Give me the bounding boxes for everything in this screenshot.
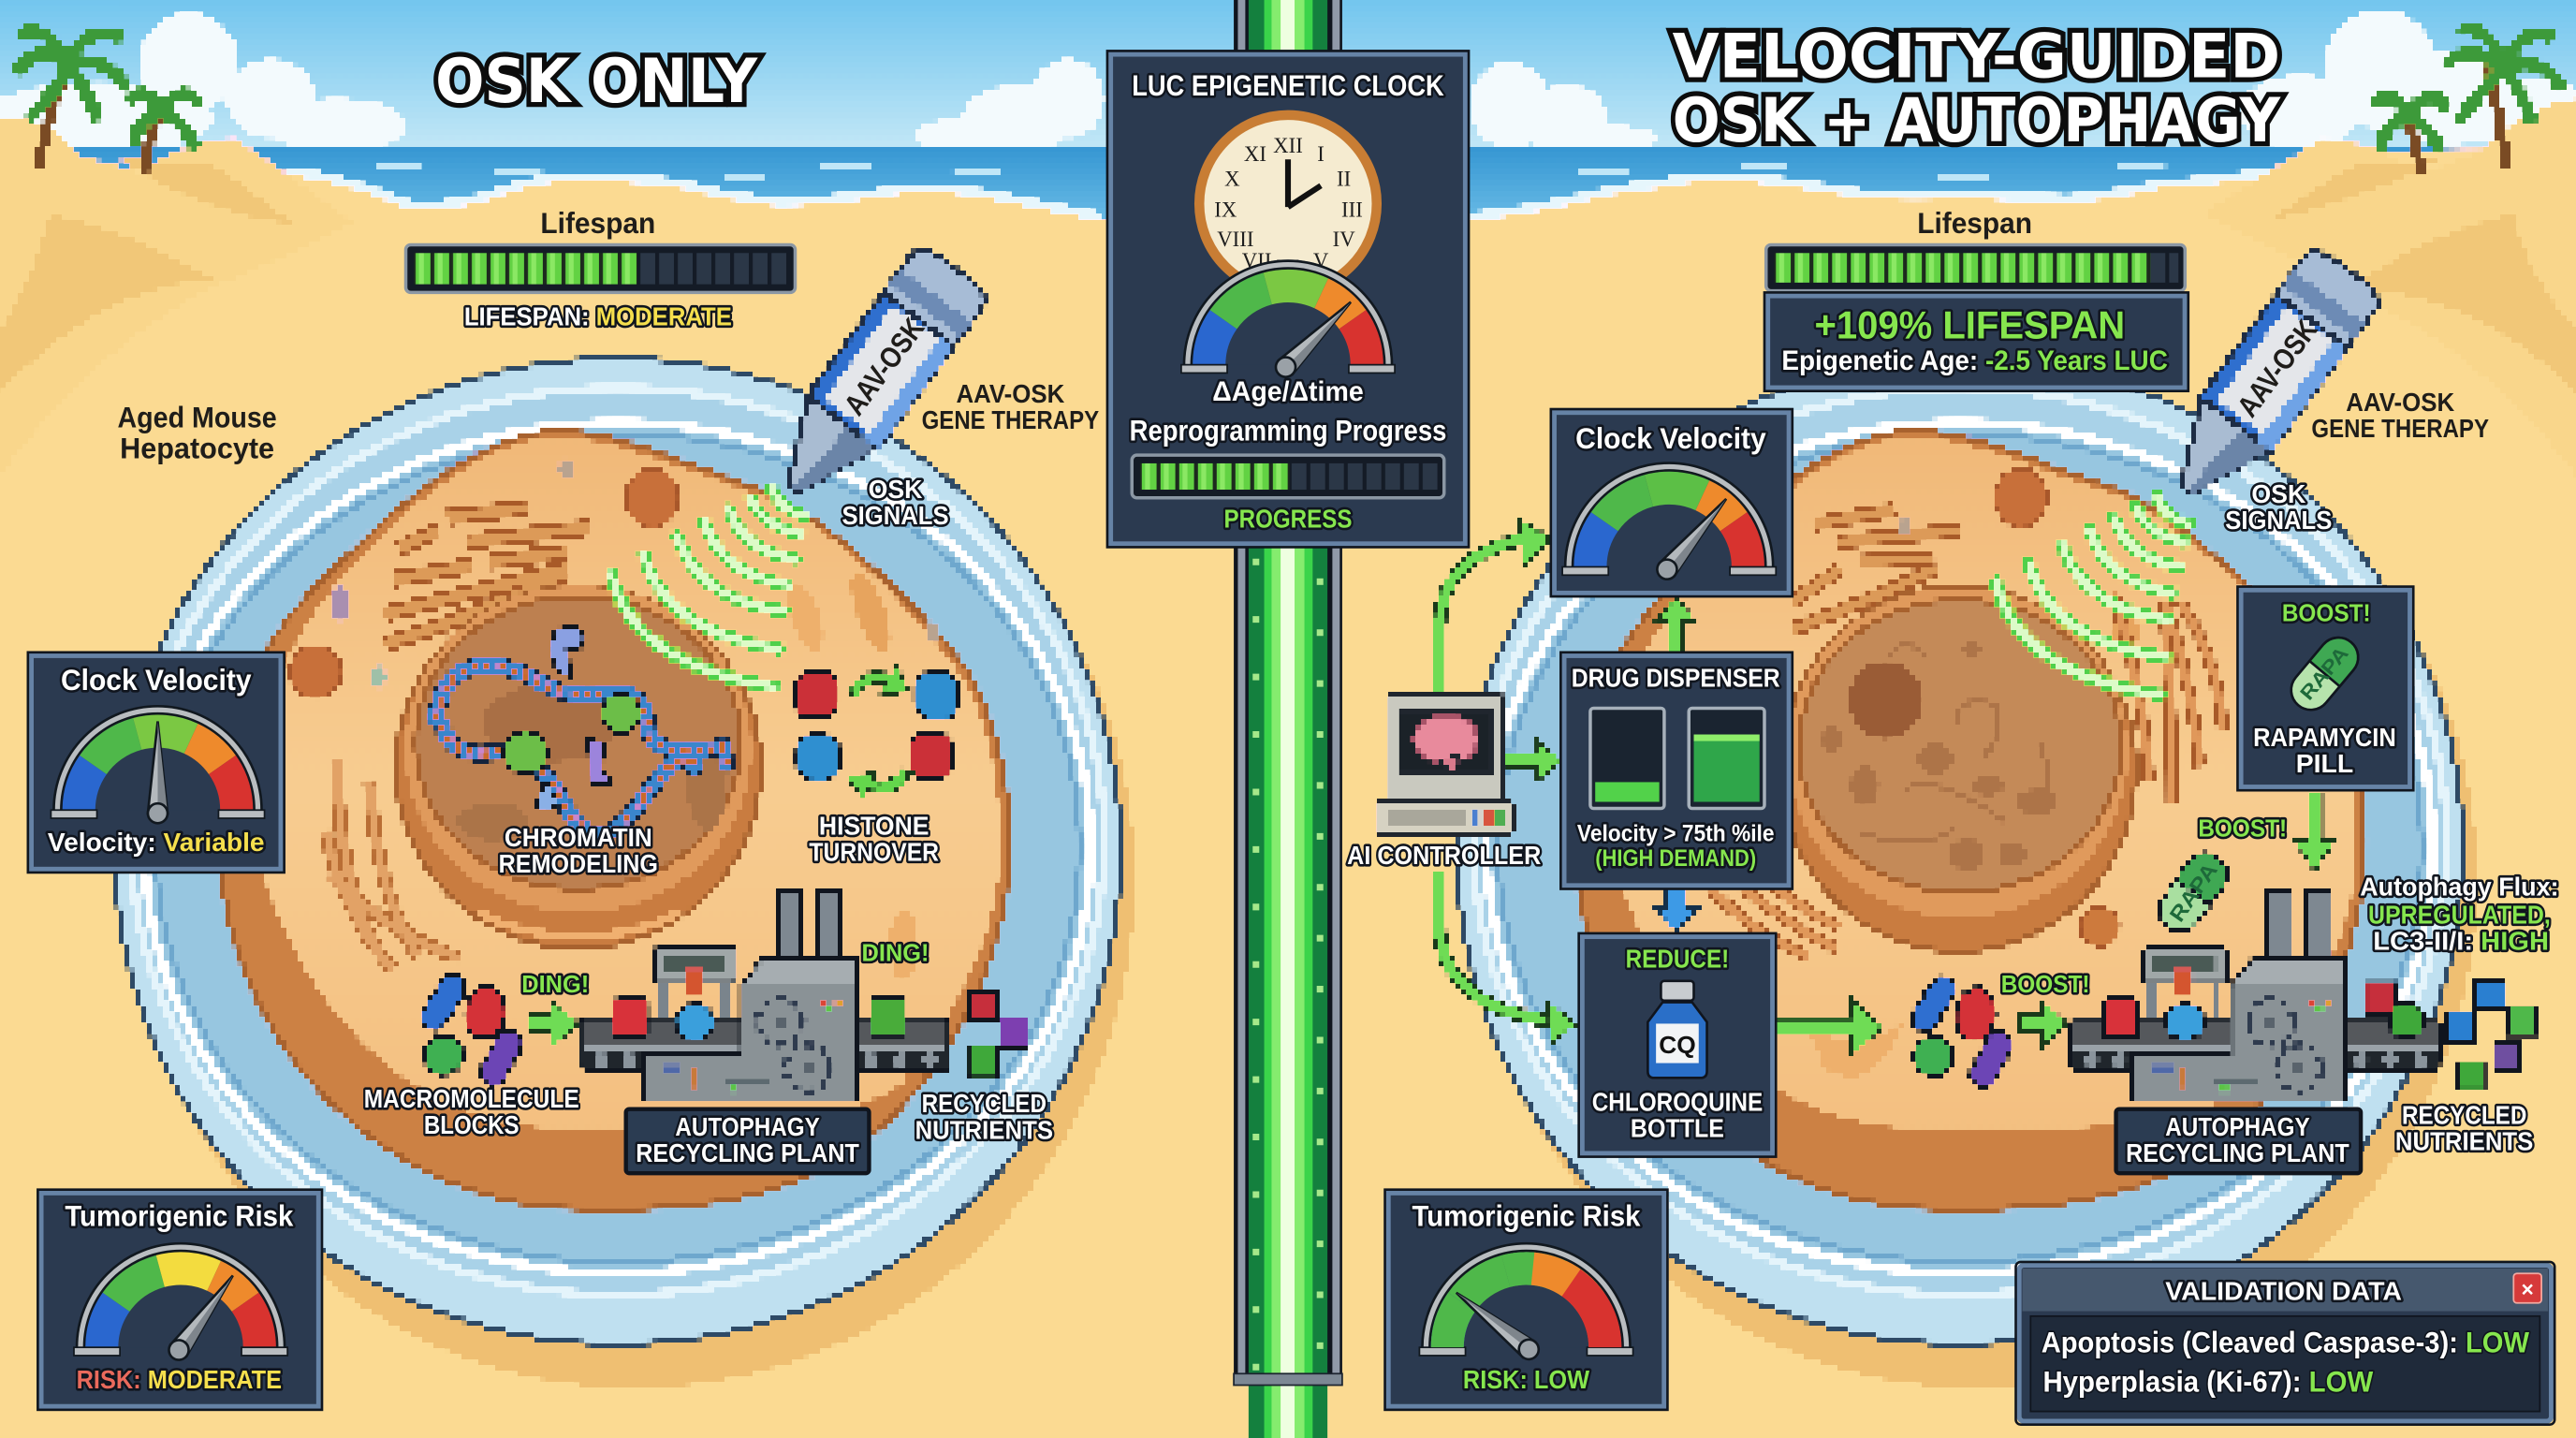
clock face xyxy=(1199,115,1377,292)
right signals xyxy=(1996,496,2190,695)
right boost label pill: BOOST! xyxy=(2198,814,2287,842)
heading: Tumorigenic Risk xyxy=(65,1198,294,1232)
title: Velocity-guided line 1: VELOCITY-GUIDED xyxy=(1673,22,2280,92)
arrow dispenser down to chloroquine xyxy=(1653,888,1699,932)
central glowing stripe xyxy=(1234,0,1342,1438)
sea xyxy=(0,148,2576,230)
boost label: BOOST! xyxy=(2282,598,2371,626)
right recycled nutrients label: RECYCLED xyxy=(2402,1100,2526,1129)
right OSK signals label: OSK xyxy=(2251,479,2306,508)
histones xyxy=(795,672,958,781)
panel: drug dispenser xyxy=(1560,653,1793,889)
arrow rapamycin down xyxy=(2295,792,2334,871)
chromatin remodeler proteins xyxy=(505,626,640,810)
right recycled nutrients label xyxy=(2395,1100,2533,1156)
clock face: III xyxy=(1341,198,1363,222)
arrow dispenser up to clock xyxy=(1656,596,1695,653)
reprogramming label: Reprogramming Progress xyxy=(1130,413,1446,447)
left syringe xyxy=(758,242,991,515)
chloroquine label xyxy=(1592,1087,1763,1143)
left OSK signals label xyxy=(842,475,949,530)
label: aged mouse hepatocyte: Hepatocyte xyxy=(120,432,274,465)
risk value: RISK: MODERATE xyxy=(77,1365,282,1394)
autophagy flux readout xyxy=(2360,873,2559,955)
left petri dish xyxy=(115,359,1135,1388)
right syringe xyxy=(2151,244,2385,516)
right dunes xyxy=(2202,98,2576,477)
golgi xyxy=(385,507,590,644)
chromatin remodeling label: REMODELING xyxy=(499,849,658,878)
right mitochondrion xyxy=(1995,468,2047,527)
left gene therapy label: GENE THERAPY xyxy=(922,405,1099,434)
clock face: VI xyxy=(1277,256,1299,279)
validation heading: VALIDATION DATA xyxy=(2165,1276,2402,1305)
close button: × xyxy=(2522,1277,2534,1301)
left arrow into plant xyxy=(529,1001,578,1047)
right macromolecule blocks xyxy=(1907,972,2016,1093)
label: aged mouse hepatocyte: Aged Mouse xyxy=(117,400,277,433)
right faint organelles xyxy=(1801,518,2139,1078)
chloroquine bottle: CQ xyxy=(1659,1031,1696,1059)
clock face: XII xyxy=(1273,134,1303,157)
left dunes xyxy=(0,117,353,477)
right lifespan bar xyxy=(1766,245,2185,291)
rapamycin label xyxy=(2253,723,2396,778)
gauge xyxy=(1562,462,1776,583)
left recycled nutrients label: NUTRIENTS xyxy=(915,1115,1053,1144)
left dune shadows xyxy=(0,156,296,394)
heading: Tumorigenic Risk xyxy=(1412,1198,1641,1232)
panel: left tumorigenic risk xyxy=(37,1190,322,1410)
left gene therapy label xyxy=(922,379,1099,434)
panel: right plant label: AUTOPHAGY xyxy=(2165,1112,2310,1141)
panel: right tumorigenic risk xyxy=(1385,1190,1667,1410)
apoptosis row: Apoptosis (Cleaved Caspase-3): LOW xyxy=(2042,1325,2529,1358)
autophagy flux readout: LC3-II/I: HIGH xyxy=(2373,926,2549,955)
right arrow into plant xyxy=(2019,1001,2067,1047)
right syringe label: AAV-OSK xyxy=(2231,313,2324,423)
progress bar xyxy=(1132,455,1444,498)
high demand text: (HIGH DEMAND) xyxy=(1595,846,1756,872)
center panel heading: LUC EPIGENETIC CLOCK xyxy=(1132,68,1444,102)
left OSK signals label: OSK xyxy=(869,475,923,504)
lifespan gain: +109% LIFESPAN xyxy=(1815,303,2125,347)
histone turnover label: TURNOVER xyxy=(809,838,939,867)
panel: chloroquine xyxy=(1579,933,1776,1157)
left ding 1: DING! xyxy=(521,970,589,998)
panel: validation data xyxy=(2016,1262,2554,1425)
left signals xyxy=(611,488,805,687)
rapamycin pill xyxy=(2283,629,2366,718)
arrow controller up to clock xyxy=(1439,521,1551,697)
right recycled nutrients xyxy=(2365,979,2535,1090)
right autophagy plant xyxy=(2070,892,2439,1101)
progress label: PROGRESS xyxy=(1224,504,1352,533)
panel: right plant label: RECYCLING PLANT xyxy=(2126,1138,2349,1167)
left autophagy plant xyxy=(580,892,949,1101)
right dune shadows xyxy=(2267,156,2576,394)
right hepatocyte cell xyxy=(1574,432,2364,1210)
right OSK signals label: SIGNALS xyxy=(2225,506,2332,535)
clock face: XI xyxy=(1244,142,1266,166)
left output cube on belt xyxy=(871,999,905,1035)
gauge xyxy=(51,705,265,823)
clock face: II xyxy=(1337,167,1351,190)
chloroquine label: CHLOROQUINE xyxy=(1592,1087,1763,1116)
panel: left plant label: RECYCLING PLANT xyxy=(636,1138,859,1167)
rapamycin pill in cell xyxy=(2151,845,2235,939)
left recycled nutrients label xyxy=(915,1089,1053,1144)
right gene therapy label xyxy=(2311,388,2489,443)
panel: LUC epigenetic clock xyxy=(1107,51,1469,547)
rapamycin label: PILL xyxy=(2296,749,2353,778)
chromatin remodeling label xyxy=(499,823,658,878)
AI controller computer xyxy=(1377,694,1513,835)
macromolecule blocks label: BLOCKS xyxy=(424,1110,520,1139)
right ER strands xyxy=(1708,594,2223,956)
chromatin DNA strands xyxy=(435,666,726,834)
left hepatocyte cell xyxy=(219,432,1009,1210)
shoreline foam xyxy=(287,171,2274,217)
title: Velocity-guided line 2: OSK + AUTOPHAGY xyxy=(1673,86,2281,156)
validation body xyxy=(2030,1316,2539,1412)
threshold text: Velocity > 75th %ile xyxy=(1577,822,1775,847)
heading: Clock Velocity xyxy=(61,663,252,697)
clock face: VIII xyxy=(1217,227,1253,251)
sky xyxy=(0,0,2576,151)
clouds xyxy=(0,10,2576,154)
left lifespan bar xyxy=(406,245,795,292)
right organelle xyxy=(2080,907,2119,946)
gauge xyxy=(74,1242,287,1364)
panel: left clock velocity xyxy=(28,653,285,873)
macromolecule blocks label: MACROMOLECULE xyxy=(364,1084,579,1113)
right recycled nutrients label: NUTRIENTS xyxy=(2395,1127,2533,1156)
gauge xyxy=(1419,1242,1633,1363)
chloroquine label: BOTTLE xyxy=(1631,1114,1724,1143)
risk value: RISK: LOW xyxy=(1463,1365,1590,1394)
heading: DRUG DISPENSER xyxy=(1572,664,1780,693)
right gene therapy label: GENE THERAPY xyxy=(2311,414,2489,443)
endoplasmic reticulum xyxy=(326,761,460,970)
delta age label: ΔAge/Δtime xyxy=(1212,376,1364,407)
panel: left plant label xyxy=(626,1109,869,1173)
left macromolecule blocks xyxy=(417,970,527,1091)
panel: left plant label: AUTOPHAGY xyxy=(675,1112,820,1141)
center gauge xyxy=(1181,259,1395,381)
clock face: IV xyxy=(1333,227,1355,251)
right nucleus xyxy=(1781,587,2136,951)
left recycled nutrients label: RECYCLED xyxy=(922,1089,1046,1118)
chloroquine bottle xyxy=(1647,981,1707,1078)
clock face: VII xyxy=(1242,249,1271,272)
chromatin remodeling label: CHROMATIN xyxy=(505,823,652,852)
label: aged mouse hepatocyte xyxy=(117,400,277,465)
right lifespan label: Lifespan xyxy=(1917,206,2032,240)
left lifespan label: Lifespan xyxy=(540,206,655,240)
heading: Clock Velocity xyxy=(1575,421,1766,455)
rapamycin label: RAPAMYCIN xyxy=(2253,723,2396,752)
pill imprint in cell: RAPA xyxy=(2164,858,2222,926)
AI controller label: AI CONTROLLER xyxy=(1347,841,1541,870)
nucleus xyxy=(396,587,761,948)
wave highlights xyxy=(378,161,2165,180)
clock face: V xyxy=(1313,249,1329,272)
clock face: IX xyxy=(1214,198,1237,222)
histone turnover label: HISTONE xyxy=(819,812,929,841)
autophagy flux readout: Autophagy Flux: xyxy=(2360,873,2559,902)
left recycled nutrients xyxy=(968,990,1029,1078)
title: OSK ONLY: OSK ONLY xyxy=(435,47,758,117)
left OSK signals label: SIGNALS xyxy=(842,501,949,530)
reduce label: REDUCE! xyxy=(1626,945,1729,974)
panel: right plant label xyxy=(2116,1109,2361,1173)
velocity value: Velocity: Variable xyxy=(48,828,265,857)
title bar xyxy=(2023,1269,2548,1312)
arrow controller to dispenser xyxy=(1505,741,1562,781)
hyperplasia row: Hyperplasia (Ki-67): LOW xyxy=(2042,1365,2373,1399)
clock face: I xyxy=(1317,142,1325,166)
panel: lifespan result xyxy=(1764,292,2188,391)
vial high xyxy=(1689,708,1764,809)
right OSK signals label xyxy=(2225,479,2332,535)
panel: right clock velocity xyxy=(1551,409,1793,596)
right arrow chloroquine to molecules xyxy=(1776,999,1882,1055)
right petri dish xyxy=(1457,359,2478,1388)
right boost label molecules: BOOST! xyxy=(2001,970,2089,998)
right golgi xyxy=(1793,509,1960,629)
panel: rapamycin xyxy=(2237,587,2413,790)
left syringe label: AAV-OSK xyxy=(837,312,930,421)
arrow controller down to chloroquine xyxy=(1439,871,1577,1043)
histone turnover arrows xyxy=(848,664,912,800)
right gene therapy label: AAV-OSK xyxy=(2346,388,2455,417)
close button xyxy=(2513,1273,2541,1303)
autophagy flux readout: UPREGULATED, xyxy=(2368,900,2551,929)
left ding 2: DING! xyxy=(862,939,929,967)
rapamycin pill: RAPA xyxy=(2296,643,2353,705)
palm trees xyxy=(20,29,2559,169)
clock face: X xyxy=(1224,167,1240,190)
epigenetic age: Epigenetic Age: -2.5 Years LUC xyxy=(1781,345,2168,376)
histone turnover label xyxy=(809,812,939,867)
macromolecule blocks label xyxy=(364,1084,579,1139)
left gene therapy label: AAV-OSK xyxy=(956,379,1065,408)
mitochondria and small organelles xyxy=(289,459,940,981)
left lifespan value: LIFESPAN: MODERATE xyxy=(464,302,732,331)
vial low xyxy=(1590,708,1664,809)
